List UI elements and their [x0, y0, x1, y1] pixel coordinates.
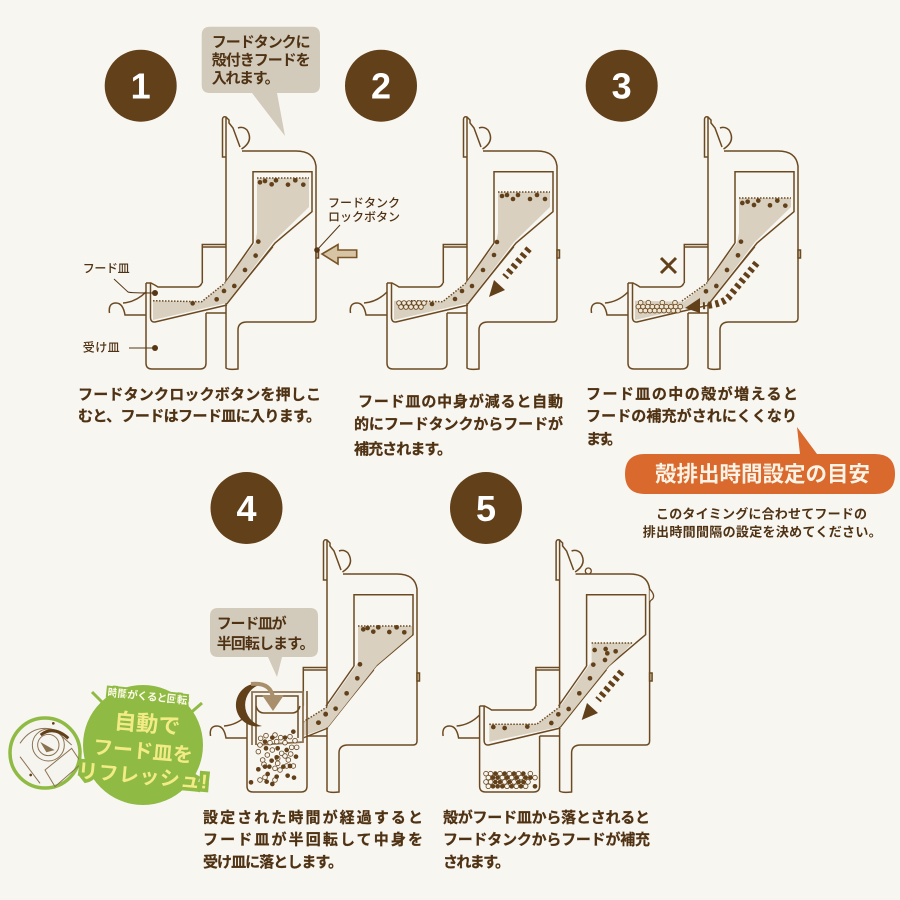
- badge divider strokes: [92, 692, 202, 716]
- text: step 2: 的にフードタンクからフードが: [354, 415, 563, 433]
- text: timing note: 排出時間間隔の設定を決めてください。: [643, 524, 882, 540]
- panel: automatic refresh badge: [10, 685, 213, 805]
- husks in dish: [397, 301, 426, 309]
- label: food dish: フード皿: [83, 262, 130, 276]
- badge headline: リフレッシュ!: [77, 760, 208, 794]
- falling pellets and husks: [249, 712, 328, 786]
- step number 2: [345, 50, 417, 122]
- step number 1: 1: [131, 66, 151, 106]
- callout: husk discharge timing guide: 殻排出時間設定の目安: [655, 462, 870, 486]
- husks in dish: [636, 300, 683, 313]
- food pellets: [190, 178, 306, 306]
- device diagram: step 1: [109, 117, 319, 369]
- label: tank lock button: [314, 196, 400, 253]
- text: step 2: フード皿の中身が減ると自動: [358, 392, 563, 410]
- food pellets in tank and chute: [316, 625, 407, 725]
- pile in receiving dish: [484, 771, 537, 789]
- panel: step 2: [345, 50, 563, 458]
- icon: cross mark: [661, 258, 676, 273]
- lid latch details: [585, 568, 654, 603]
- text: step 1: [78, 386, 321, 425]
- arrow: food refills: [582, 672, 622, 720]
- text: step 3: [586, 385, 798, 448]
- device diagram: step 5: [443, 540, 654, 792]
- badge headline: 自動で: [113, 708, 181, 739]
- callout: dish rotates half a turn: [210, 608, 318, 677]
- callout: fill the tank: フードタンクに: [212, 34, 311, 51]
- food pellets: [704, 198, 788, 294]
- step number 2: 2: [371, 66, 391, 106]
- panel: step 3: [586, 50, 895, 539]
- device diagram: step 2: [350, 117, 560, 369]
- text: step 5: 殻がフード皿から落とされると: [443, 808, 650, 826]
- step number 3: 3: [612, 66, 632, 106]
- text: step 3: フード皿の中の殻が増えると: [586, 385, 798, 403]
- label: receiving dish: 受け皿: [83, 340, 120, 354]
- step number 4: 4: [236, 488, 257, 529]
- arrow: food flows down: [489, 249, 529, 297]
- callout: fill the tank: [202, 27, 320, 136]
- callout: dish rotates half a turn: フード皿が: [217, 614, 287, 632]
- icon: rotation arrow: [236, 683, 284, 726]
- step number 3: [586, 50, 658, 122]
- callout: fill the tank: 殻付きフードを: [212, 51, 311, 69]
- text: timing note: このタイミングに合わせてフードの: [656, 506, 867, 522]
- panel: step 5: [443, 472, 654, 871]
- text: step 1: むと、フードはフード皿に入ります。: [78, 408, 321, 425]
- food fill: [303, 626, 412, 736]
- food fill: [153, 178, 309, 320]
- device diagram: step 3: [591, 117, 800, 369]
- label: food dish: [83, 262, 158, 296]
- arrow: blocked flow: [685, 263, 757, 313]
- step number 4: [210, 472, 282, 544]
- badge small heading: 時間がくると回転: [107, 686, 188, 707]
- text: step 1: フードタンクロックボタンを押しこ: [78, 386, 321, 404]
- step number 1: [105, 50, 177, 122]
- callout: fill the tank: 入れます。: [212, 70, 280, 87]
- label: receiving dish: [83, 340, 158, 354]
- callout: dish rotates half a turn: 半回転します。: [217, 634, 315, 652]
- green badge: [83, 685, 203, 805]
- text: step 4: 設定された時間が経過すると: [203, 808, 423, 826]
- rotated dish and receiving dish: [247, 691, 307, 792]
- step number 5: [450, 472, 522, 544]
- food pellets: [491, 647, 618, 730]
- text: step 4: フード皿が半回転して中身を: [203, 830, 423, 848]
- text: step 4: [203, 808, 423, 871]
- callout: husk discharge timing guide: [625, 427, 895, 494]
- text: step 5: されます。: [443, 854, 510, 871]
- panel: step 4: [203, 472, 423, 871]
- step number 5: 5: [476, 488, 496, 529]
- food pellets: [430, 193, 547, 306]
- text: step 3: フードの補充がされにくくなり: [586, 407, 797, 425]
- text: step 5: フードタンクからフードが補充: [443, 830, 650, 848]
- label: tank lock button: ロックボタン: [328, 210, 400, 224]
- text: step 2: 補充されます。: [354, 440, 452, 458]
- badge headline: フード皿を: [92, 736, 194, 767]
- arrow: press lock button: [322, 244, 357, 264]
- panel: step 1: [78, 27, 400, 425]
- text: step 4: 受け皿に落とします。: [203, 853, 343, 871]
- label: tank lock button: フードタンク: [328, 196, 400, 210]
- text: step 3: ます。: [586, 431, 622, 448]
- illustration: rotating dish closeup: [10, 718, 82, 788]
- text: timing note: [643, 506, 882, 540]
- text: step 2: [354, 392, 563, 458]
- badge headline: [77, 706, 213, 794]
- device diagram: step 4: [210, 540, 420, 792]
- text: step 5: [443, 808, 650, 871]
